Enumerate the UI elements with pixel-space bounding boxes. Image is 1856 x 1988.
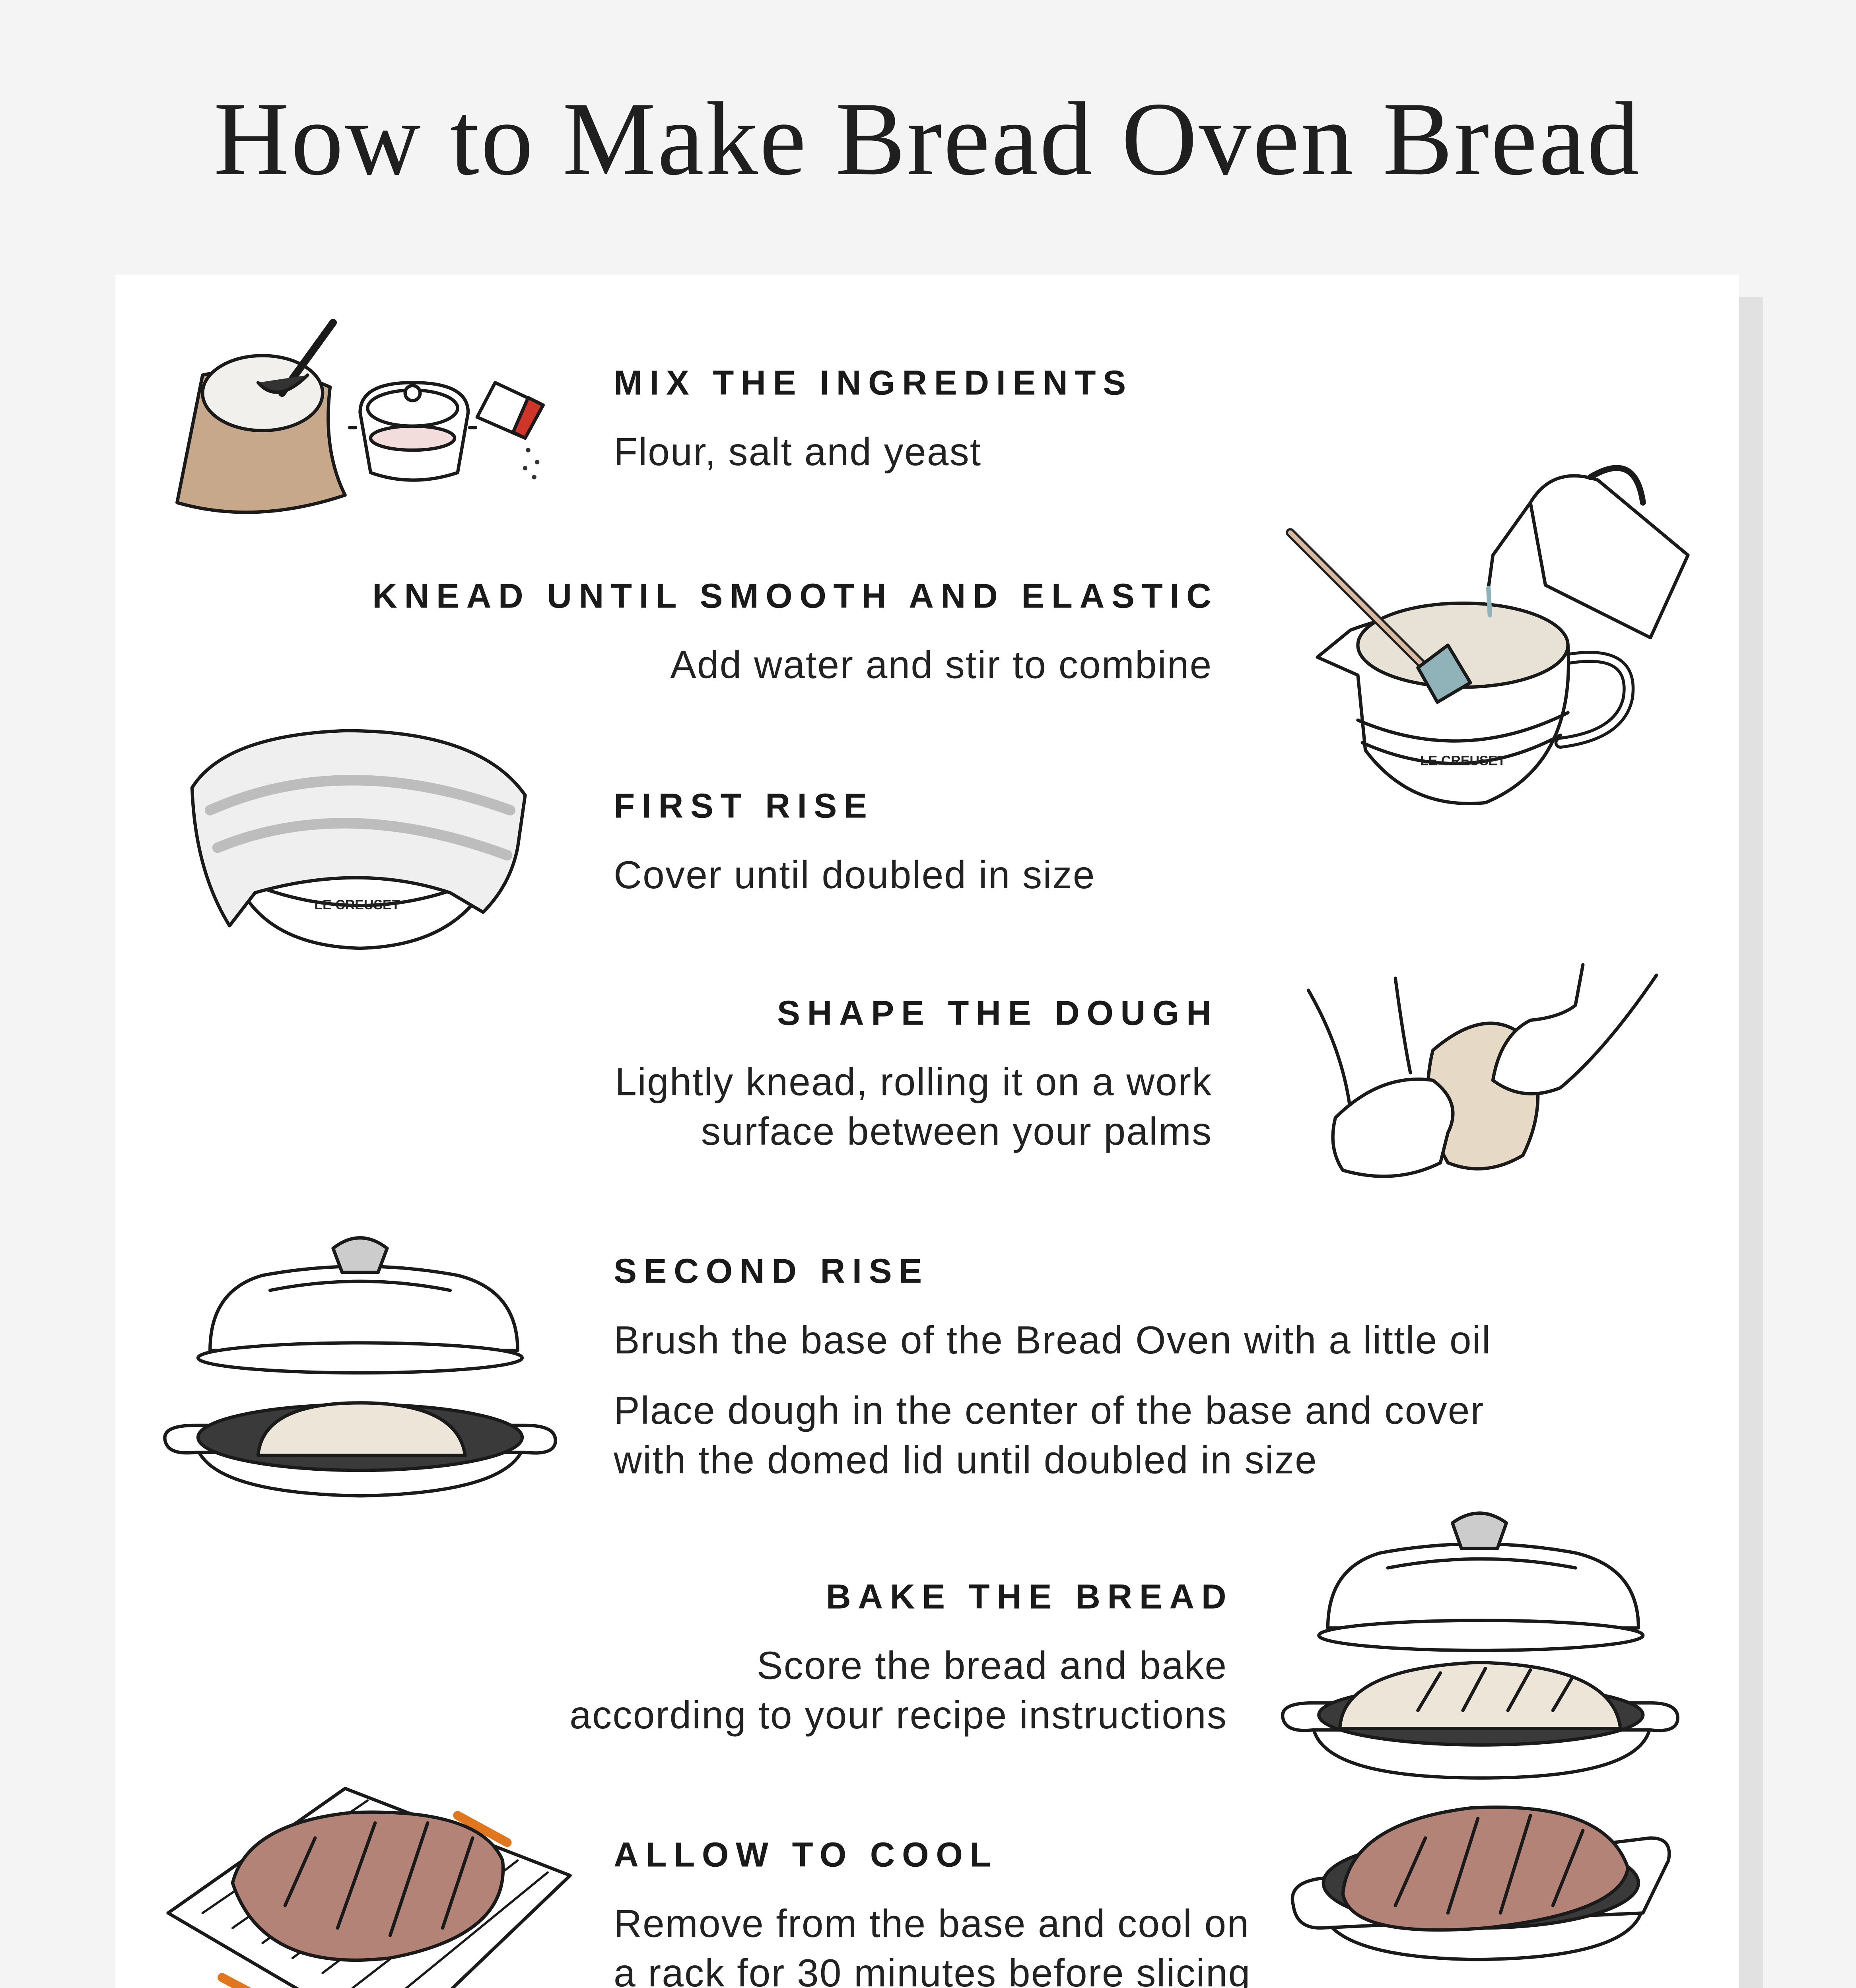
heading: bake: BAKE THE BREAD — [826, 1577, 1233, 1616]
icon: mixing bowl and jug — [1290, 468, 1688, 804]
icon: hands with dough — [1308, 965, 1656, 1176]
icon: flour sack, pot, salt packet — [177, 322, 543, 512]
text: cool — [614, 1902, 1251, 1988]
text: second rise: with the domed lid until doubled in size — [613, 1438, 1318, 1482]
card — [116, 275, 1739, 1988]
icon: covered bowl — [192, 731, 525, 948]
text: knead: Add water and stir to combine — [670, 643, 1212, 687]
text: shape: surface between your palms — [701, 1109, 1212, 1153]
heading: second rise: SECOND RISE — [614, 1252, 929, 1290]
text: mix: Flour, salt and yeast — [614, 430, 981, 474]
icon: bread oven with scored loaf — [1283, 1513, 1678, 1778]
text: cool: Remove from the base and cool on — [614, 1902, 1250, 1945]
text: shape: Lightly knead, rolling it on a work — [615, 1060, 1212, 1104]
text: second rise: Brush the base of the Bread Oven with a little oil — [614, 1318, 1491, 1362]
heading: cool: ALLOW TO COOL — [614, 1835, 998, 1874]
title: How to Make Bread Oven Bread — [214, 81, 1641, 197]
icon: bread oven open with dough — [165, 1238, 556, 1496]
heading: knead: KNEAD UNTIL SMOOTH AND ELASTIC — [372, 577, 1219, 615]
heading: shape: SHAPE THE DOUGH — [777, 994, 1219, 1032]
text: bake: according to your recipe instructions — [569, 1693, 1227, 1737]
text: shape — [615, 1060, 1212, 1153]
card shadow — [140, 297, 1763, 1988]
text: bake: Score the bread and bake — [757, 1644, 1227, 1687]
text: first rise: Cover until doubled in size — [614, 853, 1096, 897]
text: second rise: Place dough in the center of the base and cover — [614, 1388, 1484, 1432]
text: second rise — [613, 1318, 1491, 1482]
icon: covered bowl: LE CREUSET — [314, 897, 400, 912]
heading: mix: MIX THE INGREDIENTS — [614, 363, 1133, 402]
text: bake — [569, 1644, 1227, 1737]
heading: first rise: FIRST RISE — [614, 787, 874, 825]
icon: bread oven base with baked loaf — [1292, 1807, 1669, 1959]
icon: mixing bowl and jug: LE CREUSET — [1420, 753, 1506, 769]
icon: cooling rack with loaf — [168, 1788, 570, 1988]
